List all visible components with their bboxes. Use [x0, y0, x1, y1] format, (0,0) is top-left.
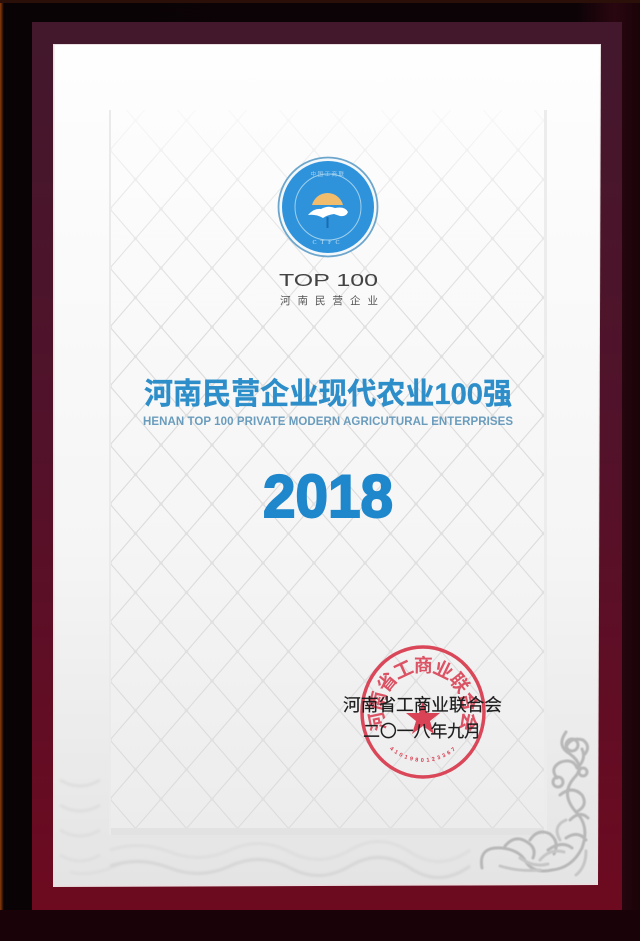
inner lattice panel: [109, 110, 547, 835]
issue date: 二〇一八年九月: [363, 722, 481, 741]
seal arc text: 河南省工商业联合会: [367, 656, 478, 732]
logo emblem: [278, 158, 378, 256]
logo wordmark: TOP 100: TOP 100: [279, 270, 378, 290]
issuer name: 河南省工商业联合会: [343, 695, 502, 715]
ornament: left and bottom border: [60, 780, 470, 878]
seal serial number: 4101980123367: [390, 747, 454, 762]
red official seal: [360, 645, 486, 779]
main title: 河南民营企业现代农业100强: [144, 378, 512, 411]
ornament: bottom-right corner floral: [481, 732, 588, 875]
emblem initials: CTFC: [312, 240, 344, 246]
seal star: [406, 701, 440, 734]
icon: white cloud: [308, 207, 348, 218]
year: 2018: [263, 463, 393, 530]
icon: sun: [312, 193, 343, 205]
icon: stem: [326, 217, 328, 228]
emblem ring text: 中国工商联: [310, 170, 346, 178]
english subtitle: HENAN TOP 100 PRIVATE MODERN AGRICUTURAL ENTERPRISES: [143, 416, 513, 428]
certificate paper: [53, 44, 601, 887]
logo subtitle: 河南民营企业: [280, 294, 378, 307]
